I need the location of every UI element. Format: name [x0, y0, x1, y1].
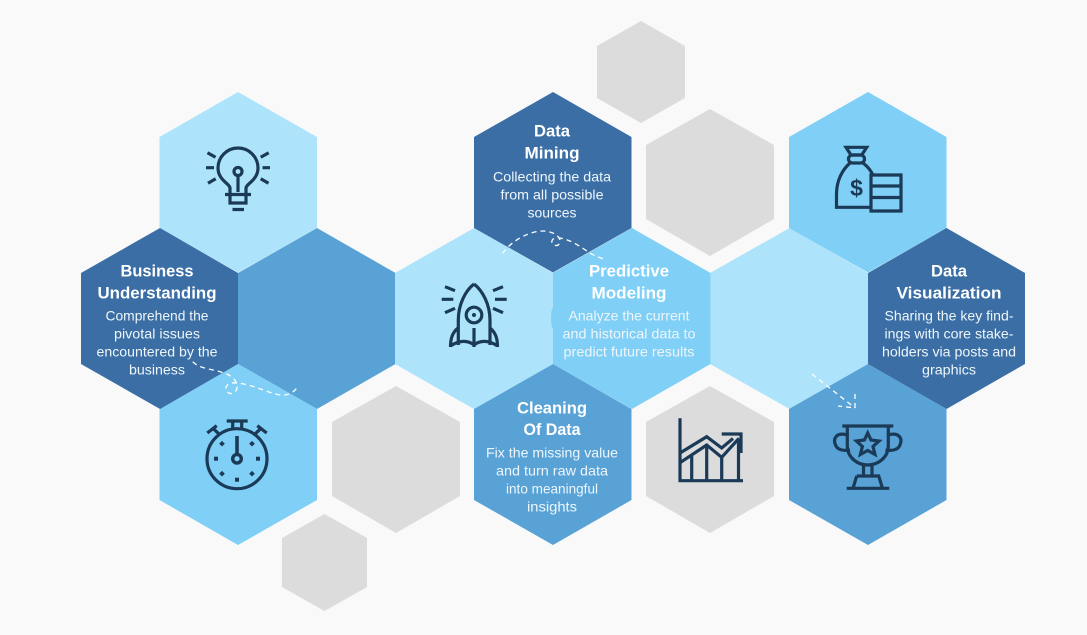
- text: Business description: pivotal issues: [114, 326, 200, 342]
- hexagon: large gray lower left: [332, 386, 460, 533]
- heading: Predictive Modeling: Modeling: [592, 284, 666, 302]
- text: Data Visualization description: holders via posts and: [882, 344, 1016, 360]
- text: Predictive Modeling description: [562, 308, 696, 360]
- text: Predictive Modeling description: and historical data to: [562, 326, 696, 342]
- arrow: dashed path business to stopwatch: [193, 362, 298, 395]
- heading: Data Mining: Data: [534, 123, 571, 141]
- heading: Data Mining: [524, 123, 580, 162]
- arrow: dashed path to trophy: [812, 374, 855, 408]
- heading: Predictive Modeling: [589, 263, 669, 302]
- text: Cleaning description: insights: [527, 499, 577, 515]
- hexagon: center light blue panel: [710, 228, 868, 409]
- heading: Data Visualization: Visualization: [896, 284, 1002, 302]
- heading: Predictive Modeling: Predictive: [589, 263, 669, 281]
- icon: trophy: [835, 426, 901, 488]
- hexagon: large gray upper right: [646, 109, 774, 256]
- text: Business description: [96, 308, 218, 378]
- text: Data Visualization description: graphics: [922, 362, 976, 378]
- heading: Data Mining: Mining: [524, 144, 580, 162]
- text: Cleaning description: [486, 445, 618, 515]
- heading: Business Understanding: Business: [120, 263, 194, 281]
- hexagon: gray chart panel: [646, 386, 774, 533]
- text: Data Visualization description: ings with core stake-: [884, 326, 1014, 342]
- hexagon: rocket panel: [395, 228, 553, 409]
- text: Data Mining description: Collecting the data: [493, 169, 611, 185]
- icon: lightbulb: [206, 148, 270, 210]
- text: Data Mining description: from all possible: [500, 187, 604, 203]
- hexagon: Cleaning Of Data: [474, 364, 632, 545]
- text: Predictive Modeling description: predict future results: [564, 344, 694, 360]
- hexagon: stopwatch panel: [160, 364, 317, 545]
- bump on left edge: [551, 308, 555, 328]
- text: Predictive Modeling description: Analyze the current: [568, 308, 690, 324]
- heading: Business Understanding: [98, 263, 216, 302]
- hexagon: Predictive Modeling: [551, 228, 710, 409]
- arrow: dashed path rocket to predictive: [503, 231, 605, 259]
- text: Business description: encountered by the: [96, 344, 218, 360]
- text: Cleaning description: into meaningful: [506, 481, 598, 497]
- text: Data Visualization description: Sharing the key find-: [884, 308, 1014, 324]
- hexagon: money bag panel: [789, 92, 946, 272]
- text: Data Mining description: sources: [528, 205, 576, 221]
- text: Cleaning description: and turn raw data: [496, 463, 608, 479]
- text: Cleaning description: Fix the missing value: [486, 445, 618, 461]
- hexagon: lightbulb panel: [160, 92, 317, 272]
- hexagon: small gray bottom: [282, 514, 367, 611]
- heading: Business Understanding: Understanding: [98, 284, 216, 302]
- hexagon: small gray top: [597, 21, 685, 123]
- hexagon: trophy panel: [789, 364, 946, 545]
- heading: Cleaning Of Data: Of Data: [524, 421, 581, 439]
- icon: money bag and coins: [836, 147, 901, 211]
- heading: Cleaning Of Data: [517, 399, 587, 439]
- hexagon: medium blue left: [238, 228, 396, 409]
- text: Data Mining description: [493, 169, 611, 221]
- text: Business description: Comprehend the: [106, 308, 209, 324]
- hexagon: Business Understanding: [81, 228, 238, 409]
- hexagon: Data Mining: [474, 92, 632, 272]
- heading: Data Visualization: [896, 263, 1002, 302]
- heading: Data Visualization: Data: [931, 263, 968, 281]
- icon: rocket: [442, 284, 507, 347]
- hexagon: Data Visualization: [868, 228, 1025, 409]
- text: Business description: business: [129, 362, 185, 378]
- icon: growth chart: [680, 418, 743, 481]
- icon: stopwatch: [207, 421, 267, 489]
- icon: dollar sign: $: [850, 175, 863, 201]
- heading: Cleaning Of Data: Cleaning: [517, 399, 587, 417]
- text: Data Visualization description: [882, 308, 1016, 378]
